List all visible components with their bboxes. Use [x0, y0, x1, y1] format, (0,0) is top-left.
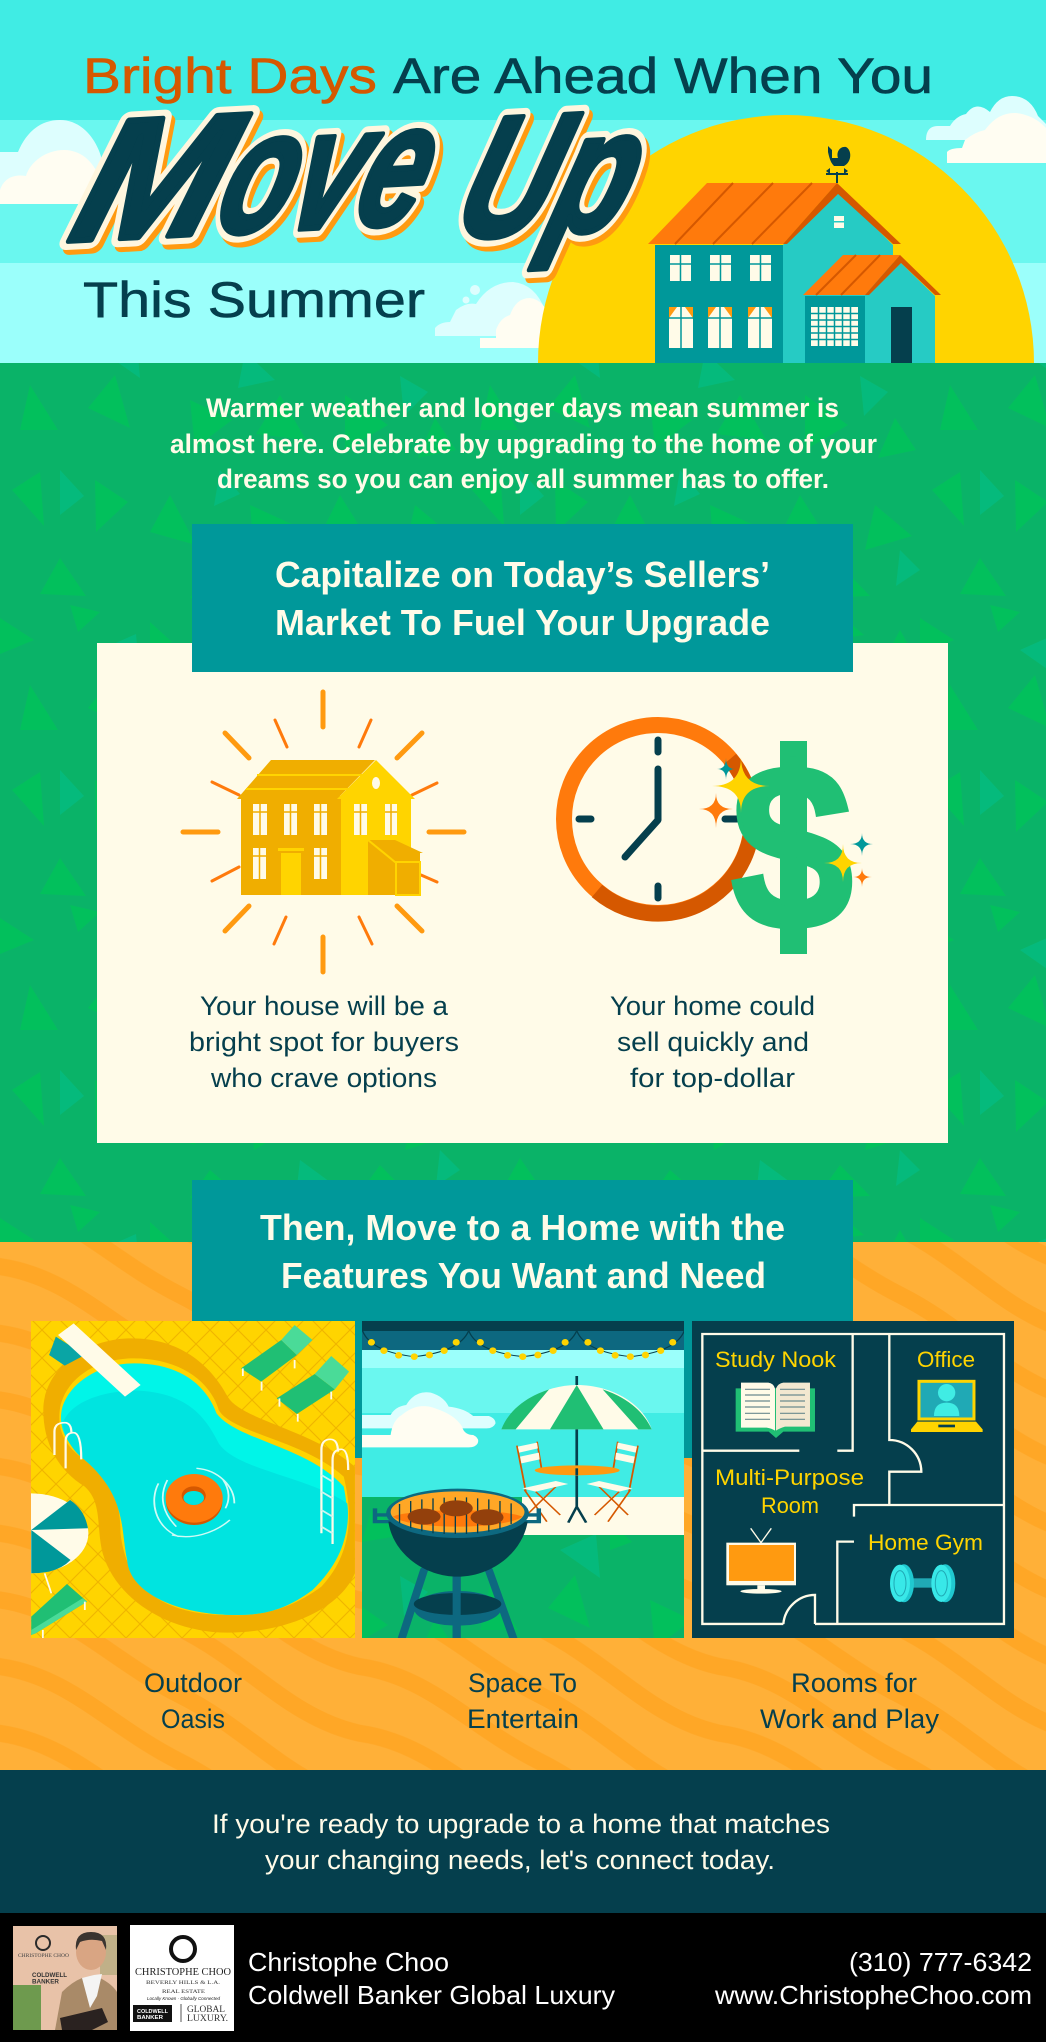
background: orange waves [0, 1242, 1046, 1770]
heading box: sellers market: Capitalize on Today’s Sellers’ [275, 554, 770, 595]
cloud: center [435, 282, 550, 348]
agent photo: COLDWELL [32, 1972, 67, 1979]
title: Move Up: Up [442, 78, 673, 280]
diving board [49, 1337, 85, 1366]
icon: tv [726, 1528, 796, 1594]
icon: clock and dollar: $ [731, 716, 853, 980]
pool rim [43, 1338, 355, 1633]
caption: rooms for work and play [760, 1668, 940, 1734]
title: top line [83, 48, 933, 104]
caption: sell quickly: for top-dollar [630, 1063, 795, 1093]
caption: rooms for work and play: Rooms for [791, 1668, 917, 1698]
ripples [154, 1468, 234, 1537]
cloud: left [0, 120, 110, 204]
caption: bright spot: Your house will be a [200, 991, 449, 1021]
chairs [517, 1442, 560, 1522]
icon: book [736, 1383, 815, 1438]
ladders [54, 1423, 348, 1544]
caption: outdoor oasis: Oasis [161, 1704, 225, 1734]
agent logo card: BANKER [137, 2015, 163, 2021]
panel: sellers market [97, 643, 948, 1143]
background: green triangles [0, 363, 1046, 1243]
room labels: Room [761, 1493, 819, 1518]
call to action band: If you're ready to upgrade to a home that matches [212, 1809, 830, 1839]
agent photo: BANKER [32, 1978, 59, 1986]
room labels [715, 1347, 983, 1555]
pool water [61, 1363, 347, 1615]
icon: dumbbell [890, 1564, 955, 1602]
agent contact [714, 1947, 1032, 2010]
caption: outdoor oasis [144, 1668, 242, 1734]
agent name: Coldwell Banker Global Luxury [248, 1980, 615, 2010]
heading box: features [192, 1180, 853, 1458]
title: Move Up [53, 67, 674, 284]
intro text: almost here. Celebrate by upgrading to the home of your [170, 429, 877, 459]
agent logo card: CHRISTOPHE CHOO [135, 1967, 231, 1978]
caption: space to entertain: Entertain [467, 1704, 579, 1734]
agent logo card: GLOBAL [187, 2004, 225, 2014]
agent logo card: BEVERLY HILLS & L.A. [146, 1981, 220, 1986]
title: Move Up: ove [203, 72, 467, 276]
room labels: Home Gym [868, 1530, 983, 1555]
agent logo card: Locally Known · Globally Connected [147, 1996, 220, 2001]
caption: bright spot [189, 991, 459, 1093]
room labels: Study Nook [715, 1347, 837, 1372]
title: Move Up: Up [439, 73, 669, 275]
title: Move Up: ove [199, 67, 463, 271]
title: This Summer: This Summer [83, 272, 425, 328]
title: Move Up: M [55, 77, 262, 278]
icon: glowing house [183, 692, 464, 972]
cloud: right [926, 96, 1046, 163]
icon: laptop [911, 1381, 983, 1432]
title: Move Up: M [58, 82, 266, 283]
title: Move Up: ove [199, 67, 463, 271]
umbrella [31, 1493, 88, 1574]
loungers [241, 1340, 297, 1382]
panel: floor plan [692, 1321, 1014, 1638]
title: top line: Are Ahead When You [393, 48, 933, 104]
intro text: Warmer weather and longer days mean summer is [206, 393, 839, 423]
table [535, 1465, 620, 1475]
sun [538, 115, 1034, 363]
house [648, 183, 941, 363]
agent logo card [130, 1925, 234, 2031]
agent photo [13, 1926, 117, 2030]
agent logo card: LUXURY. [187, 2013, 228, 2023]
caption: outdoor oasis: Outdoor [144, 1668, 242, 1698]
float ring [166, 1502, 222, 1525]
caption: bright spot: bright spot for buyers [189, 1027, 459, 1057]
agent logo card: COLDWELL [137, 2009, 169, 2015]
intro text: dreams so you can enjoy all summer has to offer. [217, 464, 829, 494]
caption: sell quickly: Your home could [610, 991, 815, 1021]
call to action band [0, 1770, 1046, 1913]
room labels: Office [917, 1347, 975, 1372]
caption: rooms for work and play: Work and Play [760, 1704, 940, 1734]
agent contact: (310) 777-6342 [849, 1947, 1032, 1977]
heading box: sellers market: Market To Fuel Your Upgrade [275, 602, 770, 643]
heading box: features: Then, Move to a Home with the [260, 1207, 785, 1248]
agent photo: CHRISTOPHE CHOO [18, 1954, 69, 1959]
grill [375, 1508, 539, 1523]
panel: pool [0, 1321, 355, 1638]
title: Move Up: M [55, 77, 262, 278]
caption: space to entertain: Space To [468, 1668, 577, 1698]
caption: sell quickly: sell quickly and [617, 1027, 809, 1057]
icon: clock and dollar [564, 716, 873, 980]
walls [702, 1334, 1004, 1624]
icon: rooster weathervane [826, 146, 850, 183]
umbrella [501, 1385, 652, 1429]
title: Move Up: Up [439, 73, 669, 275]
heading box: sellers market [192, 524, 853, 672]
agent name [248, 1947, 615, 2010]
panel: backyard grill [362, 1321, 684, 1638]
title: top line: Bright Days [83, 48, 377, 104]
caption: space to entertain [467, 1668, 579, 1734]
room labels: Multi-Purpose [715, 1465, 864, 1490]
agent logo card: REAL ESTATE [162, 1990, 205, 1995]
agent contact: www.ChristopheChoo.com [714, 1980, 1032, 2010]
heading box: features: Features You Want and Need [281, 1255, 766, 1296]
agent name: Christophe Choo [248, 1947, 449, 1977]
cloud [362, 1392, 496, 1428]
footer band [0, 1913, 1046, 2042]
caption: sell quickly [610, 991, 815, 1093]
header banner [0, 0, 1046, 363]
call to action band: your changing needs, let's connect today. [265, 1845, 775, 1875]
caption: bright spot: who crave options [210, 1063, 437, 1093]
intro text [170, 393, 877, 494]
string lights [362, 1331, 684, 1357]
